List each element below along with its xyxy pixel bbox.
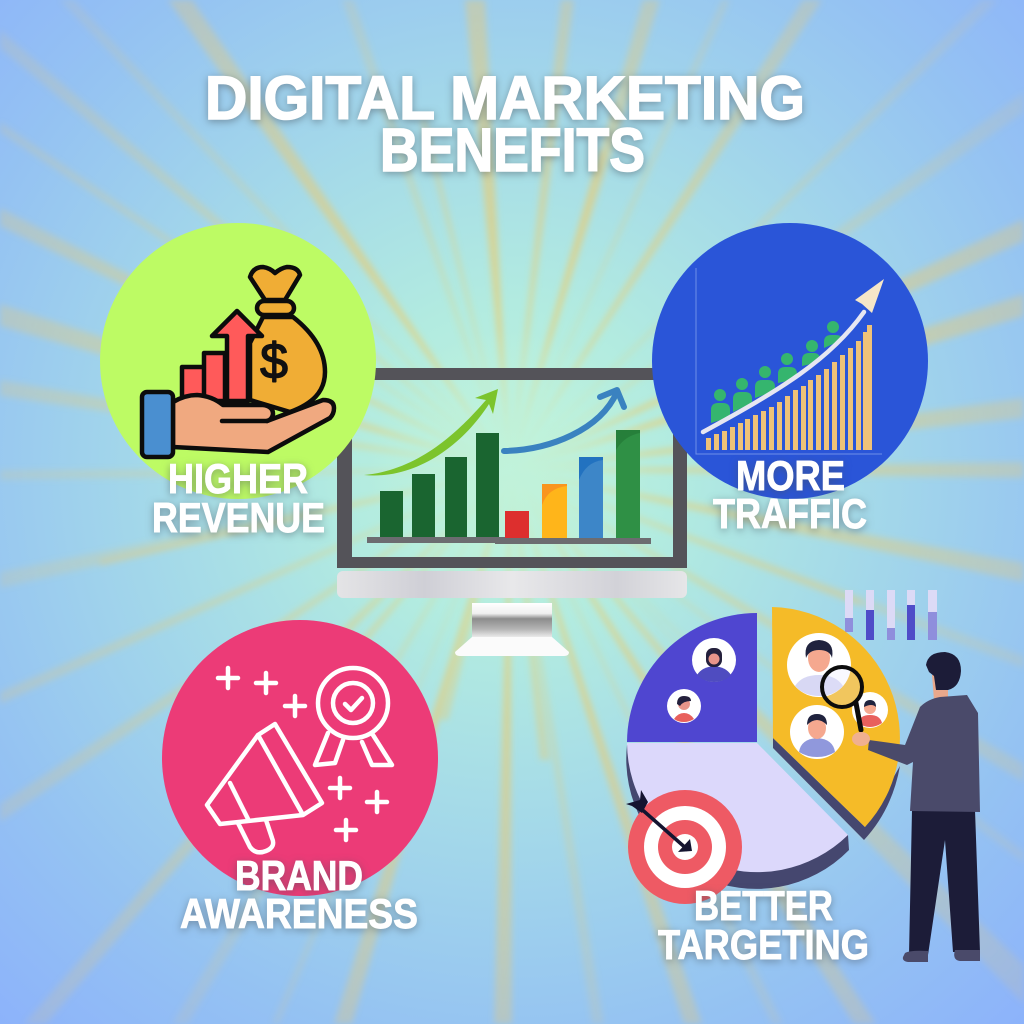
legs <box>909 810 980 955</box>
icon: target with arrow <box>626 790 742 904</box>
pie: lavender slice <box>627 743 848 872</box>
hand <box>852 732 870 746</box>
green people <box>711 321 842 423</box>
pie: yellow slice <box>772 607 900 827</box>
panel: better targeting <box>626 590 980 968</box>
traffic bars <box>708 325 870 450</box>
jacket <box>868 695 980 812</box>
monitor chin <box>337 571 687 598</box>
circle <box>162 620 438 896</box>
monitor frame <box>337 368 687 568</box>
panel: brand awareness <box>162 620 438 937</box>
monitor neck <box>472 603 552 638</box>
white rising arrow <box>703 279 884 432</box>
avatar: hoodie man <box>790 705 844 759</box>
avatar: small man <box>852 692 888 728</box>
avatar: woman <box>692 638 736 682</box>
monitor base <box>455 637 569 656</box>
label: AWARENESS <box>180 890 418 937</box>
circle <box>652 223 928 499</box>
person with magnifying glass <box>822 652 980 962</box>
label <box>658 882 869 968</box>
panel: higher revenue <box>100 223 376 541</box>
label: HIGHER <box>168 455 308 502</box>
icon: hand <box>142 392 334 457</box>
chart baseline <box>367 537 651 544</box>
icon: award badge <box>315 668 392 765</box>
label: TRAFFIC <box>713 490 867 537</box>
icon: money bag <box>250 267 325 412</box>
avatar: large man <box>787 633 851 697</box>
neck <box>932 675 948 700</box>
circle <box>100 223 376 499</box>
pie: blue slice <box>627 613 757 742</box>
pie shadow <box>626 738 900 889</box>
title <box>205 64 805 184</box>
icon: plus signs <box>218 668 387 840</box>
label: TARGETING <box>658 921 869 968</box>
shoes <box>903 950 980 962</box>
monitor with bar chart <box>337 368 687 656</box>
head and hair <box>926 652 961 690</box>
title: BENEFITS <box>380 116 645 184</box>
small column chart <box>845 590 937 640</box>
icon: megaphone <box>207 724 322 852</box>
blue growth arrow <box>504 390 624 451</box>
chart bars <box>380 430 640 538</box>
avatar: small woman <box>667 689 701 723</box>
panel: more traffic <box>652 223 928 537</box>
label: BETTER <box>694 882 833 929</box>
icon: money bag: $ <box>260 333 288 389</box>
title: DIGITAL MARKETING <box>205 64 805 132</box>
label <box>713 452 867 537</box>
green growth arrow <box>364 389 498 475</box>
label: REVENUE <box>152 494 325 541</box>
magnifying glass <box>822 667 862 730</box>
icon: rising bars and arrow <box>182 311 262 401</box>
label: MORE <box>736 452 845 499</box>
chart axes <box>696 268 882 454</box>
label: BRAND <box>235 852 363 899</box>
label <box>180 852 418 937</box>
label <box>152 455 325 541</box>
